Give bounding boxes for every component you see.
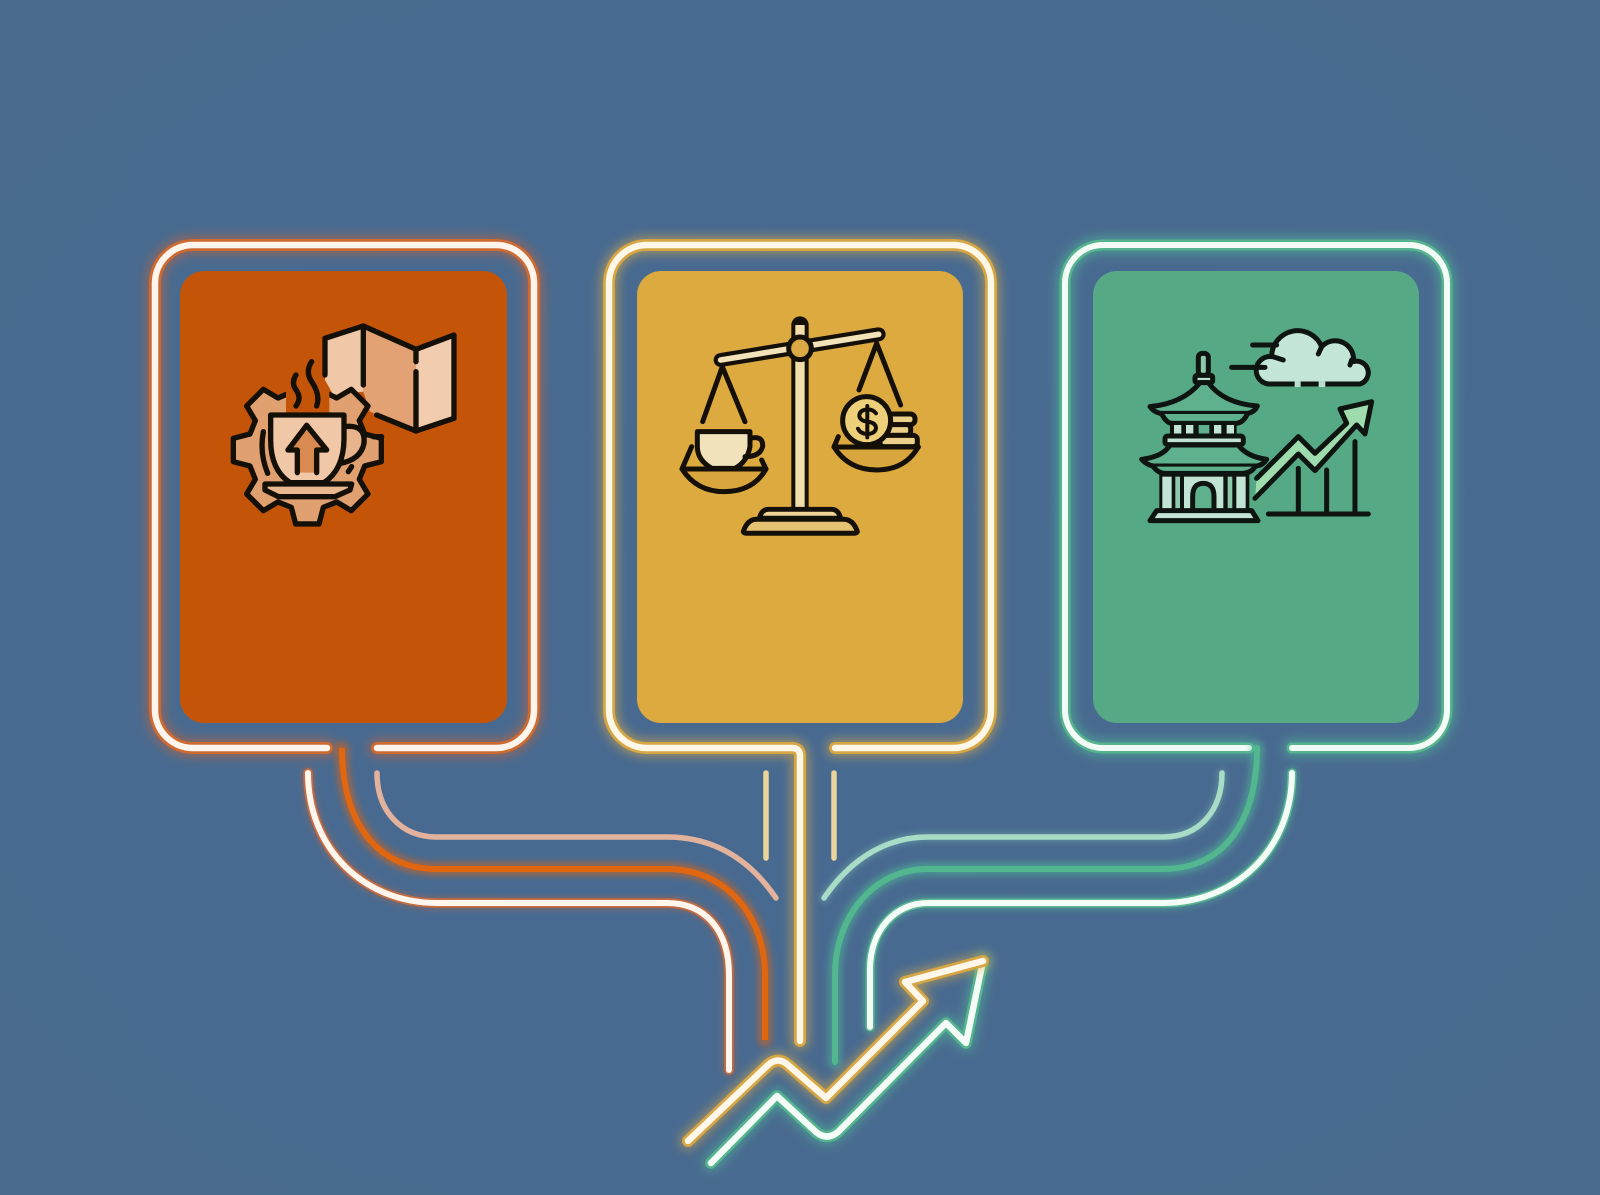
icon: pagoda: [1142, 353, 1267, 521]
panel: orange card with coffee gear and map: [155, 245, 534, 748]
green middle line: [835, 748, 1257, 1062]
amber neon frame and central line: [609, 245, 991, 1041]
icon: balance scale: [682, 325, 918, 533]
orange outer line: [308, 773, 729, 1070]
orange card: [180, 271, 507, 723]
icon: cup with up arrow: [265, 415, 364, 497]
icon: cloud: [1232, 331, 1368, 384]
green card: [1093, 271, 1419, 723]
orange connector lines: [308, 748, 776, 1070]
scale post: [774, 325, 826, 508]
icon: gear: [233, 387, 382, 524]
peach inner line: [377, 773, 776, 898]
scale base: [743, 509, 857, 533]
amber short vertical lines: [766, 773, 834, 858]
orange neon frame: [155, 245, 534, 748]
icon: pagoda cloud and growth chart: [1142, 331, 1372, 521]
panel: green card with pagoda, cloud and chart: [1065, 245, 1447, 748]
right strings and pan with coins: [834, 343, 918, 470]
orange middle line: [342, 748, 765, 1040]
green outer line: [870, 773, 1292, 1027]
icon: coffee cup on gear with map: [233, 326, 454, 524]
icon: growth arrow and bars: [1255, 402, 1372, 514]
left strings and pan with cup: [682, 367, 766, 492]
amber card: [637, 271, 963, 723]
arrow: green rising trend line: [711, 961, 983, 1163]
icon: folded map: [325, 326, 454, 431]
panel: amber card with balance scale: [609, 245, 991, 1041]
arrow: amber rising trend line: [688, 961, 983, 1141]
mint inner line: [824, 773, 1222, 898]
green neon frame: [1065, 245, 1447, 748]
icon: steam: [293, 362, 318, 406]
scale beam: [721, 334, 879, 360]
green connector lines: [824, 748, 1292, 1062]
